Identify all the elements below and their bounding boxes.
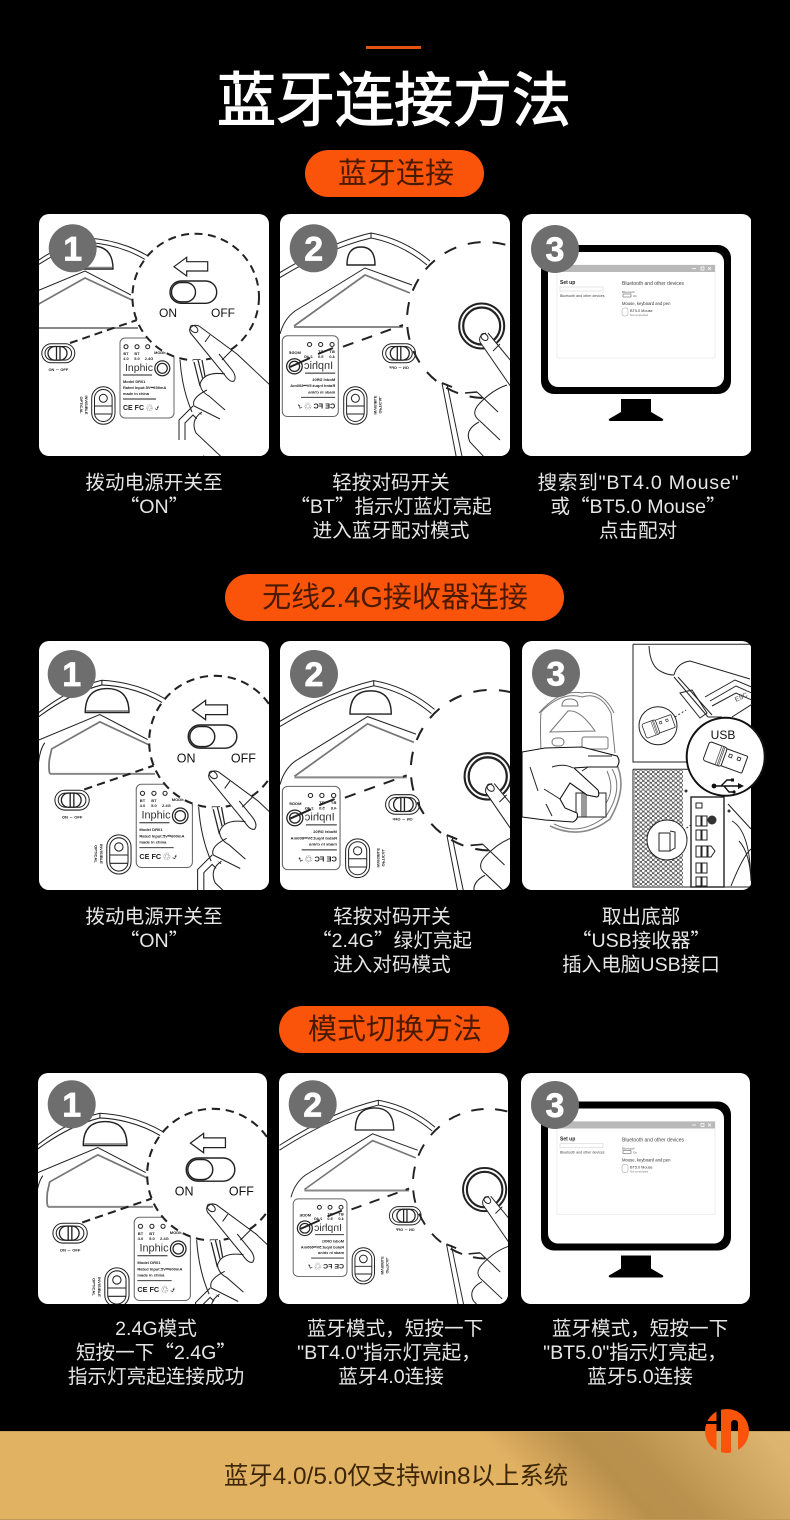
- caption: bluetooth step 3: 或“BT5.0 Mouse”: [550, 490, 726, 519]
- panel: bluetooth step 2: INVISIBLE: [373, 395, 378, 415]
- panel: mode step 2: INVISIBLE: [380, 1256, 384, 1274]
- panel: mode step 3 monitor: Mouse, keyboard and pen: [622, 1158, 671, 1162]
- panel: mode step 2: [279, 1073, 508, 1304]
- panel: wireless step 1: 1: [62, 656, 81, 694]
- panel: mode step 2: BT: [327, 1212, 333, 1216]
- panel: bluetooth step 2: MODE: [288, 350, 301, 355]
- panel: mode step 3 monitor: Bluetooth and other devices: [560, 1150, 605, 1154]
- title: 蓝牙连接方法: [217, 68, 571, 134]
- caption: wireless step 3: “USB接收器”: [572, 924, 710, 953]
- panel: bluetooth step 1: made in china: [123, 391, 150, 396]
- panel: mode step 2: 2: [303, 1086, 322, 1124]
- panel: wireless step 2: 2.4G: [305, 805, 314, 810]
- caption: mode step 1: [68, 1318, 244, 1388]
- caption: mode step 3: 蓝牙模式，短按一下: [552, 1318, 728, 1340]
- panel: wireless step 1: INVISIBLE: [99, 844, 104, 864]
- panel: wireless step 3 USB receiver: 3: [547, 655, 565, 693]
- panel: bluetooth step 3 monitor: [522, 214, 751, 456]
- section pill: mode switching: [279, 1006, 509, 1053]
- panel: mode step 1: Model DR01: [137, 1260, 161, 1265]
- panel: bluetooth step 2: BT: [317, 349, 323, 354]
- panel: wireless step 2: 2: [305, 656, 323, 694]
- panel: mode step 3 monitor: On: [633, 1150, 637, 1154]
- panel: bluetooth step 3 monitor: On: [633, 294, 637, 298]
- USB callout circle: USB: [711, 728, 735, 742]
- caption: mode step 1: 指示灯亮起连接成功: [68, 1366, 244, 1388]
- caption: mode step 2: [297, 1318, 483, 1388]
- panel: wireless step 2: OPTICAL: [381, 848, 386, 867]
- section pill: bluetooth: 蓝牙连接: [338, 157, 454, 190]
- panel: wireless step 1: MODE: [172, 797, 184, 802]
- panel: wireless step 1: 2.4G: [162, 803, 171, 808]
- panel: bluetooth step 1: Rated Input:5V⎓600mA: [123, 385, 167, 390]
- panel: bluetooth step 1: 2.4G: [145, 356, 153, 361]
- panel: mode step 1: 4.0: [138, 1236, 144, 1241]
- panel: mode step 1: OPTICAL: [92, 1278, 97, 1296]
- panel: mode step 1: 2.4G: [160, 1236, 169, 1241]
- caption: mode step 2: "BT4.0"指示灯亮起，: [297, 1342, 481, 1364]
- panel: bluetooth step 2: Rated Input:5V⎓600mA: [290, 383, 335, 388]
- panel: mode step 2: ON － OFF: [395, 1228, 415, 1232]
- panel: wireless step 1: Model DR01: [139, 827, 163, 832]
- panel: mode step 3 monitor: Not connected: [630, 1170, 648, 1174]
- panel: mode step 1: 1: [62, 1086, 81, 1124]
- panel: wireless step 2: BT: [319, 800, 325, 805]
- panel: bluetooth step 1: 4.0: [123, 356, 129, 361]
- caption: bluetooth step 3: [538, 472, 739, 542]
- caption: bluetooth step 1: 拨动电源开关至: [85, 472, 223, 494]
- panel: bluetooth step 2: OPTICAL: [378, 396, 383, 414]
- panel: wireless step 1: OPTICAL: [94, 845, 99, 863]
- panel: mode step 3 monitor: 3: [546, 1087, 564, 1125]
- section pill: bluetooth: [305, 150, 484, 197]
- caption: bluetooth step 2: 进入蓝牙配对模式: [313, 520, 469, 542]
- caption: wireless step 2: [312, 906, 472, 976]
- panel: bluetooth step 2: 4.0: [328, 354, 335, 359]
- footer band: 蓝牙4.0/5.0仅支持win8以上系统: [224, 1463, 568, 1490]
- panel: wireless step 2: CE FC ♲ ⍻: [299, 854, 337, 863]
- caption: wireless step 1: “ON”: [120, 924, 188, 953]
- panel: bluetooth step 2: ON － OFF: [389, 365, 409, 370]
- section pill: mode switching: 模式切换方法: [308, 1013, 482, 1046]
- panel: bluetooth step 3 monitor: Set up: [560, 280, 575, 286]
- section pill: wireless 2.4G: [225, 574, 564, 621]
- caption: mode step 2: 蓝牙模式，短按一下: [307, 1318, 483, 1340]
- caption: mode step 2: 蓝牙4.0连接: [338, 1366, 444, 1388]
- caption: wireless step 3: 取出底部: [602, 906, 680, 928]
- panel: wireless step 1: 4.0: [140, 803, 146, 808]
- panel: bluetooth step 3 monitor: Mouse, keyboard and pen: [622, 301, 671, 306]
- panel: mode step 1: Inphic: [139, 1243, 169, 1255]
- panel: mode step 2: Inphic: [314, 1223, 342, 1234]
- panel: bluetooth step 2: [280, 214, 510, 456]
- panel: mode step 1: Rated Input:5V⎓600mA: [137, 1266, 182, 1271]
- panel: wireless step 1: CE FC ♲ ⍻: [139, 852, 176, 861]
- panel: bluetooth step 1: 1: [63, 230, 82, 268]
- caption: mode step 3: [543, 1318, 728, 1388]
- panel: mode step 2: OPTICAL: [385, 1256, 389, 1274]
- panel: wireless step 1: made in china: [139, 840, 167, 845]
- panel: mode step 3 monitor: Bluetooth: [622, 1146, 635, 1150]
- panel: mode step 1: BT: [149, 1231, 155, 1236]
- caption: bluetooth step 2: 轻按对码开关: [332, 472, 450, 494]
- caption: bluetooth step 1: [85, 472, 223, 519]
- panel: wireless step 2: INVISIBLE: [376, 848, 381, 868]
- panel: wireless step 2: 4.0: [330, 805, 337, 810]
- panel: mode step 2: CE FC ♲ ⍻: [308, 1263, 344, 1271]
- laptop inset: ESC: [734, 692, 749, 704]
- panel: wireless step 2: MODE: [289, 801, 301, 806]
- panel: bluetooth step 3 monitor: Not connected: [630, 313, 648, 317]
- panel: wireless step 1: 5.0: [151, 803, 157, 808]
- panel: wireless step 1: Rated Input:5V⎓600mA: [139, 833, 184, 838]
- caption: wireless step 1: [85, 906, 223, 953]
- panel: mode step 1: BT: [138, 1231, 144, 1236]
- panel: bluetooth step 3 monitor: Bluetooth and other devices: [560, 294, 605, 298]
- desktop tower inset: [633, 769, 762, 887]
- panel: mode step 2: made in china: [317, 1251, 344, 1255]
- panel: wireless step 1: ON: [177, 751, 196, 765]
- panel: mode step 2: BT: [338, 1212, 344, 1216]
- panel: bluetooth step 1: OFF: [211, 306, 235, 320]
- panel: wireless step 1: [39, 641, 269, 890]
- panel: bluetooth step 2: Model DR01: [311, 377, 335, 382]
- caption: wireless step 3: [562, 906, 720, 976]
- panel: bluetooth step 2: BT: [329, 349, 335, 354]
- panel: wireless step 2: Inphic: [304, 812, 335, 824]
- caption: mode step 3: "BT5.0"指示灯亮起，: [543, 1342, 727, 1364]
- panel: mode step 2: MODE: [299, 1213, 311, 1217]
- panel: mode step 1: ON: [175, 1184, 194, 1198]
- footer band: [0, 1431, 790, 1520]
- panel: mode step 3 monitor: [521, 1073, 750, 1304]
- panel: bluetooth step 1: INVISIBLE: [84, 395, 89, 415]
- caption: wireless step 2: 进入对码模式: [333, 954, 451, 976]
- caption: bluetooth step 3: 搜索到"BT4.0 Mouse": [538, 472, 739, 494]
- panel: bluetooth step 1: MODE: [154, 350, 166, 355]
- panel: mode step 3 monitor: Set up: [560, 1136, 575, 1142]
- panel: bluetooth step 1: Model DR01: [123, 379, 146, 384]
- panel: wireless step 2: Model DR01: [312, 829, 337, 834]
- panel: mode step 3 monitor: BT5.0 Mouse: [630, 1166, 653, 1170]
- panel: bluetooth step 2: 2.4G: [304, 354, 313, 359]
- panel: bluetooth step 1: BT: [123, 351, 129, 356]
- panel: bluetooth step 1: ON － OFF: [48, 367, 69, 372]
- panel: mode step 1: [38, 1073, 267, 1304]
- logo: [705, 1409, 749, 1453]
- panel: bluetooth step 3 monitor: Bluetooth: [622, 290, 635, 294]
- panel: bluetooth step 1: CE FC ♲ ⍻: [123, 404, 159, 412]
- panel: mode step 2: 5.0: [327, 1217, 333, 1221]
- caption: wireless step 1: 拨动电源开关至: [85, 906, 223, 928]
- laptop inset: [633, 644, 762, 762]
- caption: mode step 1: 2.4G模式: [115, 1318, 197, 1340]
- panel: bluetooth step 1: [39, 214, 269, 456]
- USB callout circle: [687, 718, 765, 796]
- panel: wireless step 2: 5.0: [318, 805, 325, 810]
- panel: wireless step 1: ON － OFF: [62, 815, 83, 820]
- panel: mode step 3 monitor: Bluetooth and other devices: [622, 1138, 684, 1144]
- panel: bluetooth step 2: CE FC ♲ ⍻: [298, 403, 335, 410]
- panel: wireless step 2: BT: [330, 800, 336, 805]
- panel: bluetooth step 1: OPTICAL: [79, 396, 84, 414]
- panel: mode step 2: 2.4G: [314, 1217, 322, 1221]
- panel: bluetooth step 1: BT: [134, 351, 140, 356]
- caption: wireless step 2: “2.4G”绿灯亮起: [312, 924, 472, 953]
- panel: wireless step 1: BT: [140, 798, 146, 803]
- panel: mode step 1: MODE: [170, 1230, 182, 1235]
- panel: wireless step 1: Inphic: [141, 810, 171, 822]
- panel: bluetooth step 1: 5.0: [134, 356, 140, 361]
- panel: mode step 1: CE FC ♲ ⍻: [137, 1285, 174, 1294]
- caption: bluetooth step 1: “ON”: [120, 490, 188, 519]
- panel: mode step 1: 5.0: [149, 1236, 155, 1241]
- panel: mode step 1: made in china: [137, 1273, 165, 1278]
- panel: wireless step 3 USB receiver: [522, 641, 765, 890]
- heading accent bar: [366, 46, 421, 49]
- panel: wireless step 2: Rated Input:5V⎓600mA: [290, 836, 337, 840]
- caption: wireless step 3: 插入电脑USB接口: [562, 954, 720, 976]
- panel: bluetooth step 2: Inphic: [303, 360, 333, 372]
- panel: wireless step 2: ON － OFF: [392, 817, 413, 822]
- section pill: wireless 2.4G: 无线2.4G接收器连接: [262, 581, 528, 614]
- panel: bluetooth step 1: ON: [159, 306, 177, 320]
- panel: bluetooth step 1: Inphic: [125, 362, 153, 374]
- hand holding receiver: [522, 747, 619, 822]
- caption: wireless step 2: 轻按对码开关: [333, 906, 451, 928]
- panel: bluetooth step 3 monitor: BT5.0 Mouse: [630, 309, 653, 313]
- caption: bluetooth step 2: [290, 472, 492, 542]
- panel: bluetooth step 2: 2: [304, 230, 323, 268]
- panel: wireless step 1: OFF: [231, 751, 256, 765]
- panel: bluetooth step 3 monitor: Bluetooth and other devices: [622, 281, 684, 287]
- panel: wireless step 1: BT: [151, 798, 157, 803]
- panel: bluetooth step 2: 5.0: [317, 354, 323, 359]
- panel: wireless step 2: [280, 641, 510, 890]
- caption: mode step 1: 短按一下“2.4G”: [76, 1336, 236, 1365]
- panel: bluetooth step 3 monitor: 3: [546, 231, 564, 269]
- panel: mode step 2: Model DR01: [321, 1240, 344, 1243]
- panel: mode step 1: ON － OFF: [60, 1248, 81, 1253]
- panel: wireless step 2: made in china: [308, 842, 337, 847]
- caption: bluetooth step 2: “BT”指示灯蓝灯亮起: [290, 490, 492, 519]
- panel: mode step 1: OFF: [229, 1184, 254, 1198]
- small mouse underside: [539, 692, 621, 832]
- panel: mode step 1: INVISIBLE: [97, 1277, 102, 1297]
- caption: bluetooth step 3: 点击配对: [599, 520, 677, 542]
- caption: mode step 3: 蓝牙5.0连接: [587, 1366, 693, 1388]
- panel: bluetooth step 2: made in china: [307, 389, 335, 394]
- panel: mode step 2: Rated Input:5V⎓600mA: [301, 1245, 344, 1249]
- panel: mode step 2: 4.0: [338, 1217, 344, 1221]
